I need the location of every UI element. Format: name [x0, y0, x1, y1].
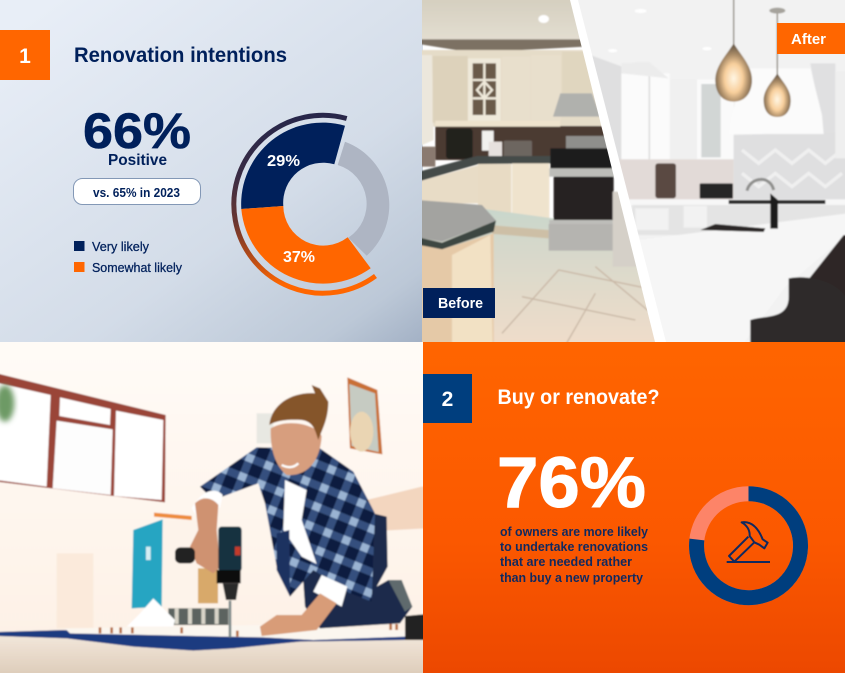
photo: kitchen after — [569, 0, 845, 347]
label: after: After — [791, 31, 826, 48]
label: before: Before — [438, 295, 483, 312]
stat: 66 percent: 66% — [83, 103, 191, 159]
panel: renovation intentions — [0, 0, 423, 342]
donut chart: renovation intentions — [234, 115, 389, 293]
divider: before and after — [570, 0, 666, 342]
label: after — [777, 23, 845, 54]
stat label: positive: Positive — [108, 152, 167, 169]
ring chart: 76 percent — [696, 494, 801, 598]
legend: Very likely — [92, 240, 150, 254]
heading: buy or renovate: Buy or renovate? — [498, 386, 660, 409]
photo: kitchen before — [419, 0, 662, 345]
value: 29 percent: 29% — [267, 153, 300, 170]
description: that are needed rather — [500, 555, 632, 569]
badge: number 1 — [0, 30, 50, 80]
value: 37 percent: 37% — [283, 249, 315, 266]
photo: woman drilling — [0, 337, 427, 673]
description — [500, 525, 648, 585]
description: to undertake renovations — [500, 540, 648, 554]
legend: Somewhat likely — [92, 261, 183, 275]
stat: 76 percent: 76% — [497, 444, 646, 523]
heading: renovation intentions: Renovation intentions — [74, 44, 287, 67]
badge: number 1: 1 — [19, 45, 31, 68]
description: than buy a new property — [500, 571, 643, 585]
comparison pill: vs. 65% in 2023 — [93, 186, 180, 200]
icon: hammer — [727, 522, 770, 562]
description: of owners are more likely — [500, 525, 648, 539]
badge: number 2 — [423, 374, 472, 423]
legend — [74, 240, 183, 275]
panel: buy or renovate — [423, 342, 845, 673]
comparison pill — [74, 178, 200, 204]
badge: number 2: 2 — [442, 388, 453, 411]
label: before — [423, 288, 495, 318]
